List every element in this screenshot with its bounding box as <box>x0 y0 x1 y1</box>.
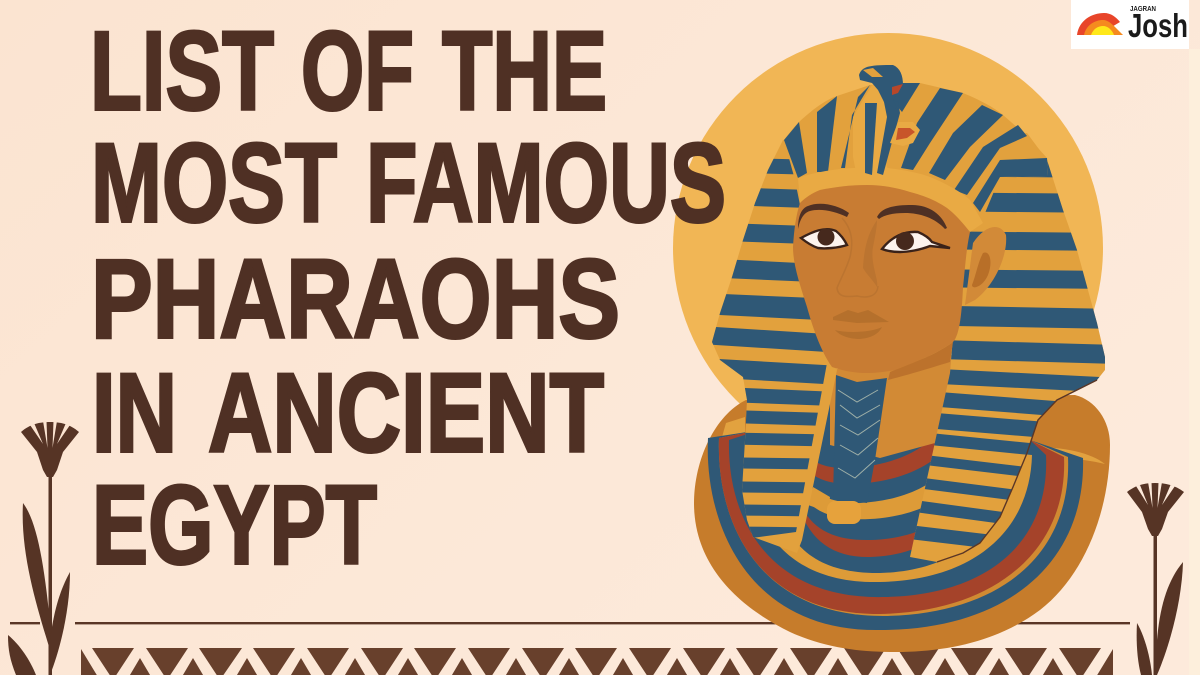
right lappet shadow edge <box>937 380 1097 562</box>
sun halo <box>673 33 1103 463</box>
eyes <box>801 228 950 252</box>
eyebrows <box>798 204 947 229</box>
title: OF <box>301 8 414 134</box>
pharaoh illustration <box>694 65 1120 652</box>
beard knob <box>827 501 861 524</box>
collar bands <box>708 390 1083 630</box>
title: THE <box>442 8 607 134</box>
title: IN <box>92 350 177 476</box>
headband <box>798 168 983 232</box>
title: PHARAOHS <box>91 236 620 362</box>
title: FAMOUS <box>366 120 726 246</box>
collar highlight pieces <box>722 417 1105 464</box>
broad collar body <box>694 395 1110 652</box>
left headdress lappet <box>712 140 837 547</box>
title: LIST <box>90 8 274 134</box>
nose <box>837 218 878 297</box>
icon: right papyrus flower <box>1127 482 1184 675</box>
chin shadow <box>888 342 953 380</box>
logo: Jagran Josh <box>1071 0 1189 49</box>
title: MOST <box>91 120 337 246</box>
title <box>90 8 726 588</box>
side ornament <box>890 122 920 146</box>
beard <box>833 375 887 503</box>
ear <box>965 227 1006 305</box>
horizontal rule <box>10 622 1130 624</box>
logo sun icon <box>1077 13 1123 35</box>
triangle border pattern <box>81 648 1113 675</box>
face <box>793 185 970 373</box>
icon: left papyrus flower <box>8 421 79 675</box>
neck <box>830 355 952 458</box>
lips <box>833 310 889 339</box>
headdress dome <box>784 83 1048 225</box>
logo wordmark: JAGRAN <box>1130 4 1156 13</box>
title: ANCIENT <box>208 350 604 476</box>
right headdress lappet <box>910 133 1105 562</box>
cobra ornament <box>853 65 903 178</box>
title: EGYPT <box>92 462 377 588</box>
